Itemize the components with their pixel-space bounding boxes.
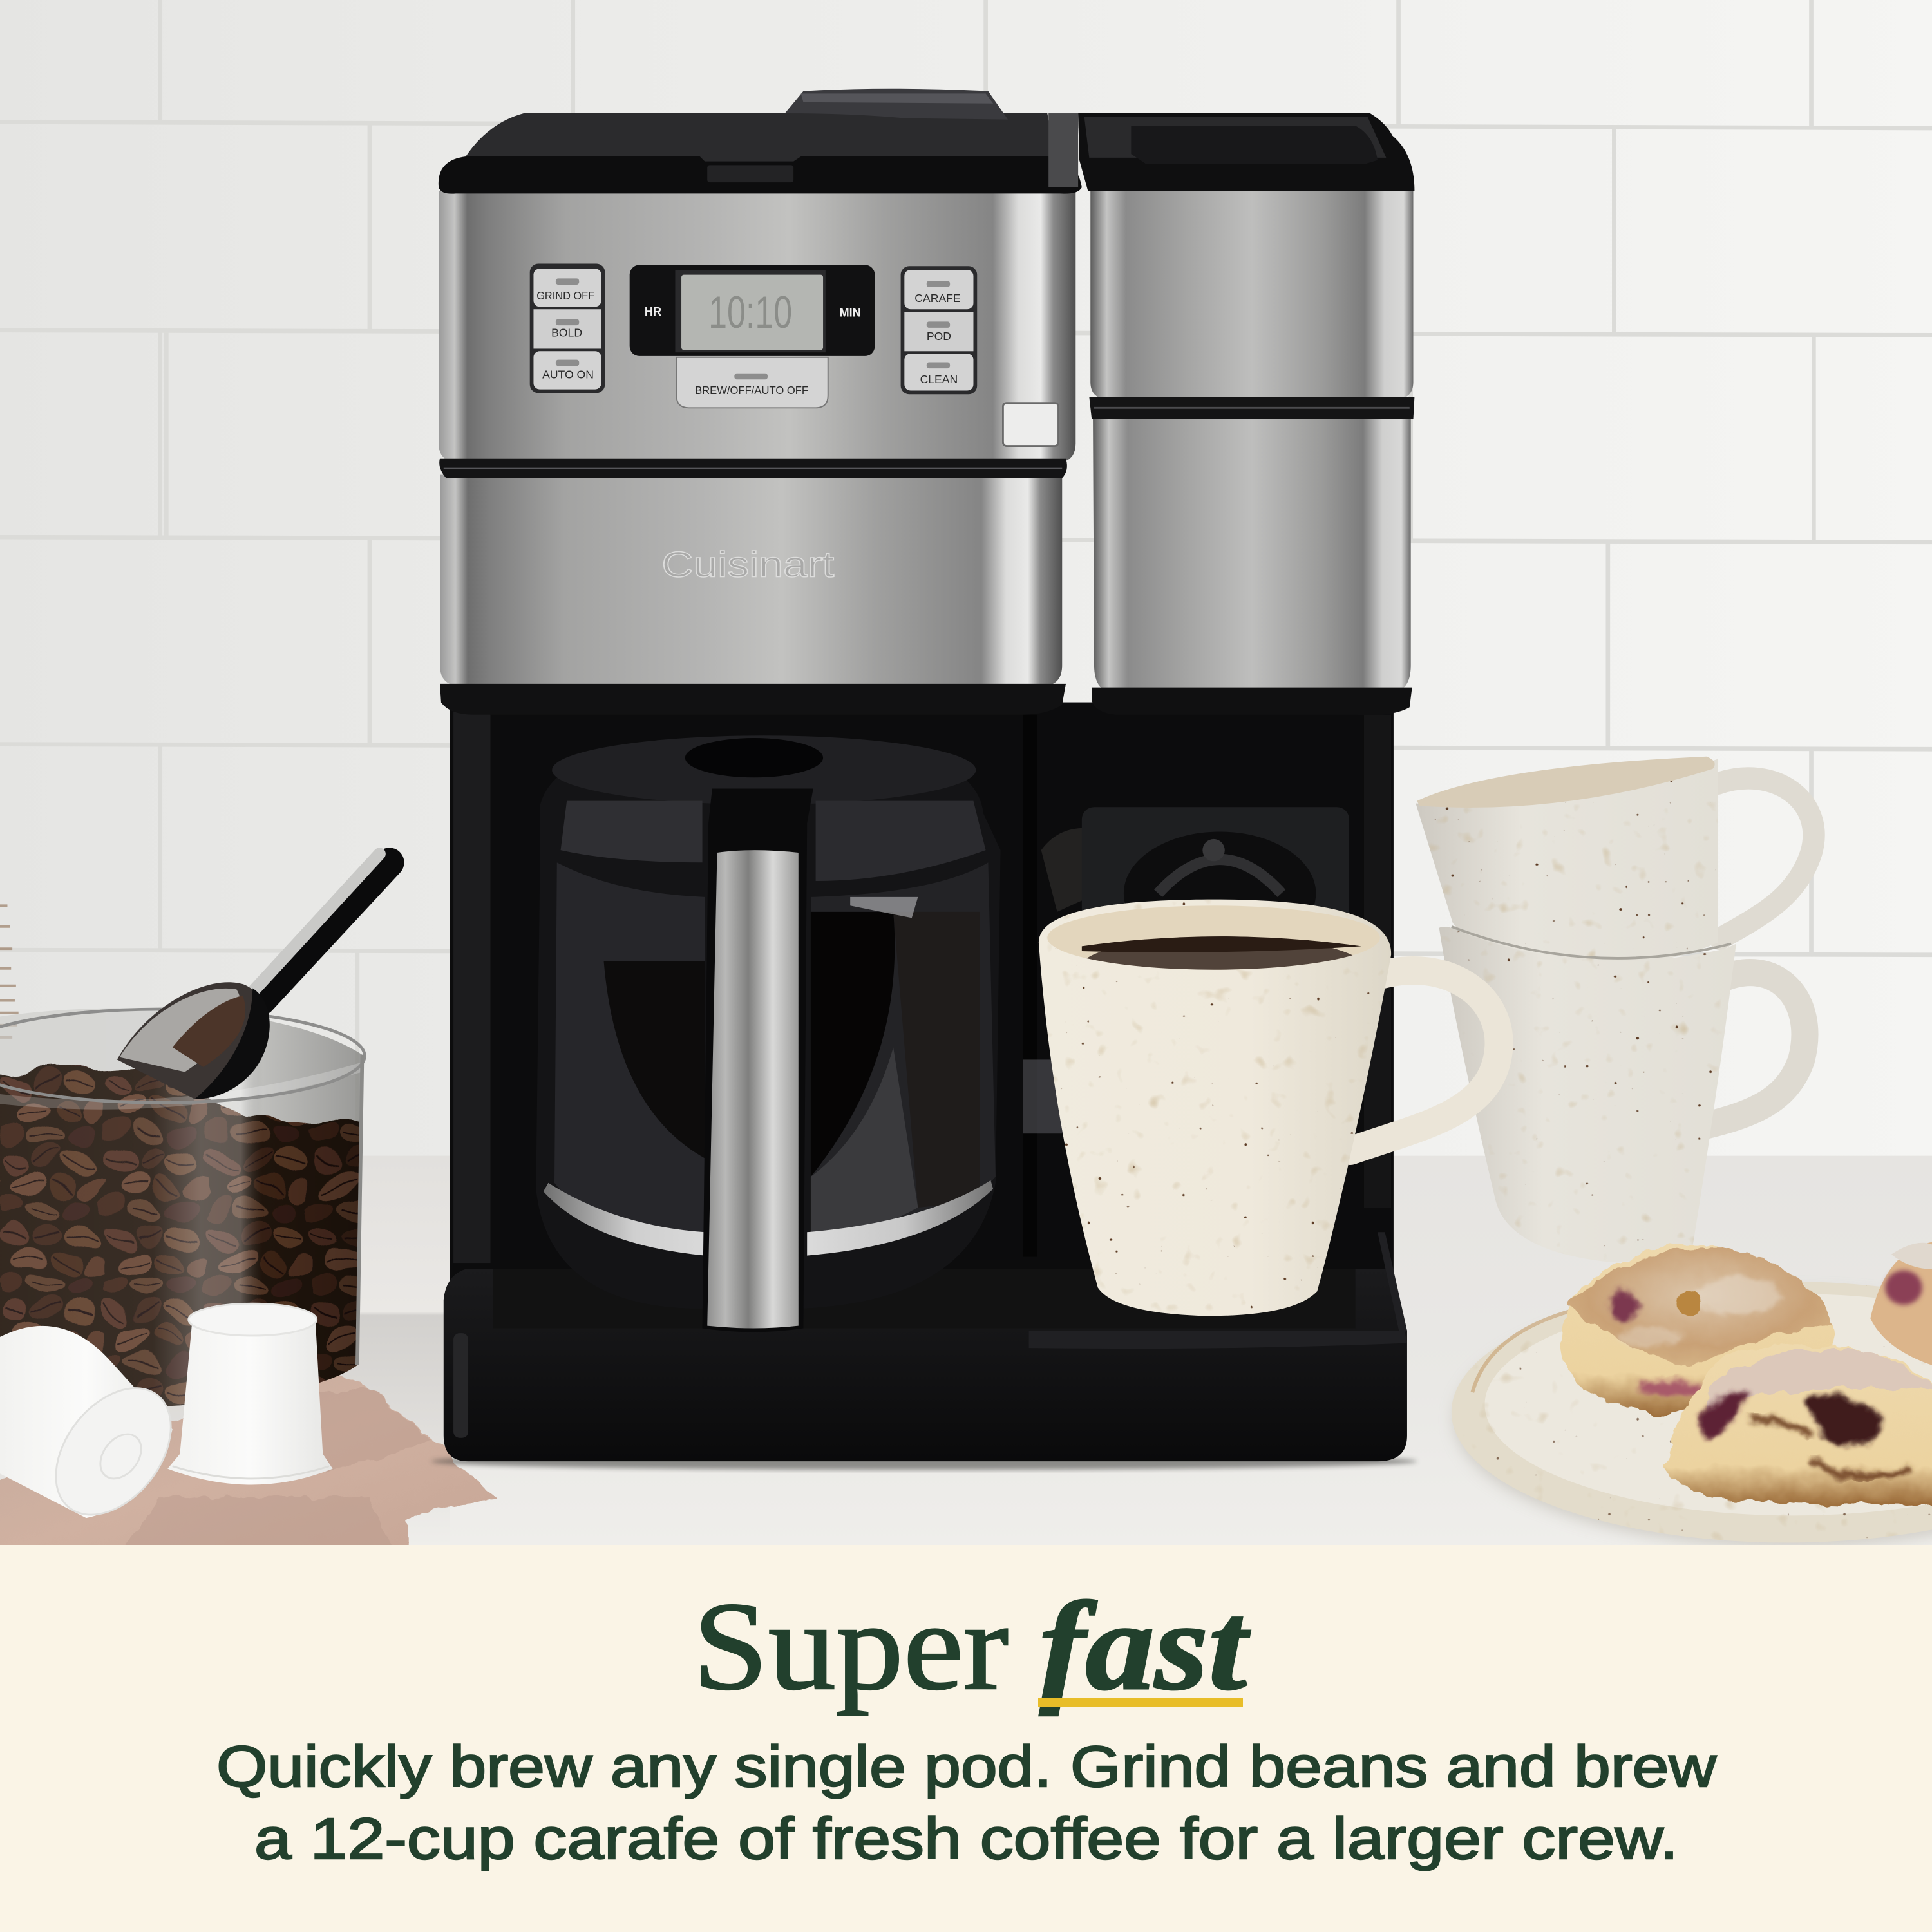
right lower stainless xyxy=(1093,417,1411,692)
body text: a 12-cup carafe of fresh coffee for a larger crew. xyxy=(254,1807,1678,1871)
tipped pod xyxy=(0,1326,194,1537)
coffee pods xyxy=(0,1303,333,1537)
coffee scoop xyxy=(117,854,390,1099)
panel: caption band xyxy=(0,1545,1932,1932)
left buttons: AUTO ON xyxy=(542,368,594,381)
display: HR xyxy=(645,305,661,318)
carafe xyxy=(536,735,1001,1332)
white power button xyxy=(1003,403,1058,446)
front mug with coffee xyxy=(1039,900,1499,1316)
coffee maker xyxy=(431,89,1417,1470)
tiled wall xyxy=(0,0,1932,1164)
title: Super xyxy=(693,1577,1009,1716)
left buttons: BOLD xyxy=(551,326,582,339)
display: MIN xyxy=(840,307,861,319)
right black band xyxy=(1092,688,1412,715)
marble counter xyxy=(0,1156,1932,1545)
underline xyxy=(1038,1698,1243,1707)
right upper stainless xyxy=(1090,191,1414,399)
drip tray base xyxy=(444,1232,1407,1461)
shadow under base xyxy=(431,1453,1417,1470)
left upper stainless panel xyxy=(439,191,1075,463)
Cuisinart logo: Cuisinart xyxy=(661,544,834,584)
right buttons: CARAFE xyxy=(914,292,961,305)
right buttons: POD xyxy=(927,330,951,343)
left lower black band xyxy=(440,684,1066,715)
display xyxy=(630,265,875,356)
title xyxy=(693,1577,1251,1716)
upper back mug xyxy=(1416,757,1814,964)
cloth napkin xyxy=(0,1376,498,1545)
body text: Quickly brew any single pod. Grind beans and brew xyxy=(216,1735,1717,1799)
carafe handle xyxy=(703,788,813,1332)
body text xyxy=(216,1735,1717,1871)
left lower stainless panel xyxy=(440,475,1062,687)
right buttons: CLEAN xyxy=(920,373,958,386)
scone far right xyxy=(1870,1242,1932,1365)
right lid xyxy=(1078,113,1414,191)
plate of scones xyxy=(1452,1242,1932,1548)
pod holder xyxy=(1041,807,1349,913)
left buttons: GRIND OFF xyxy=(536,289,594,302)
brew button: BREW/OFF/AUTO OFF xyxy=(695,384,808,397)
left buttons xyxy=(530,263,605,393)
display: 10:10 xyxy=(708,287,792,338)
right column xyxy=(1048,113,1414,715)
upright pod xyxy=(167,1303,333,1484)
control panel xyxy=(530,263,1058,446)
carafe steel band xyxy=(544,1180,993,1256)
middle seam xyxy=(439,459,1067,478)
scone right xyxy=(1666,1345,1932,1506)
lower back mug xyxy=(1439,927,1804,1262)
back mugs stack xyxy=(1416,757,1814,1262)
right buttons xyxy=(901,266,977,394)
left lid xyxy=(439,89,1082,194)
glass jar of coffee beans xyxy=(0,1001,370,1429)
black body xyxy=(450,703,1394,1282)
right seam xyxy=(1089,397,1414,419)
brew button xyxy=(676,357,828,408)
scone left xyxy=(1562,1244,1836,1417)
title: fast xyxy=(1039,1577,1251,1716)
